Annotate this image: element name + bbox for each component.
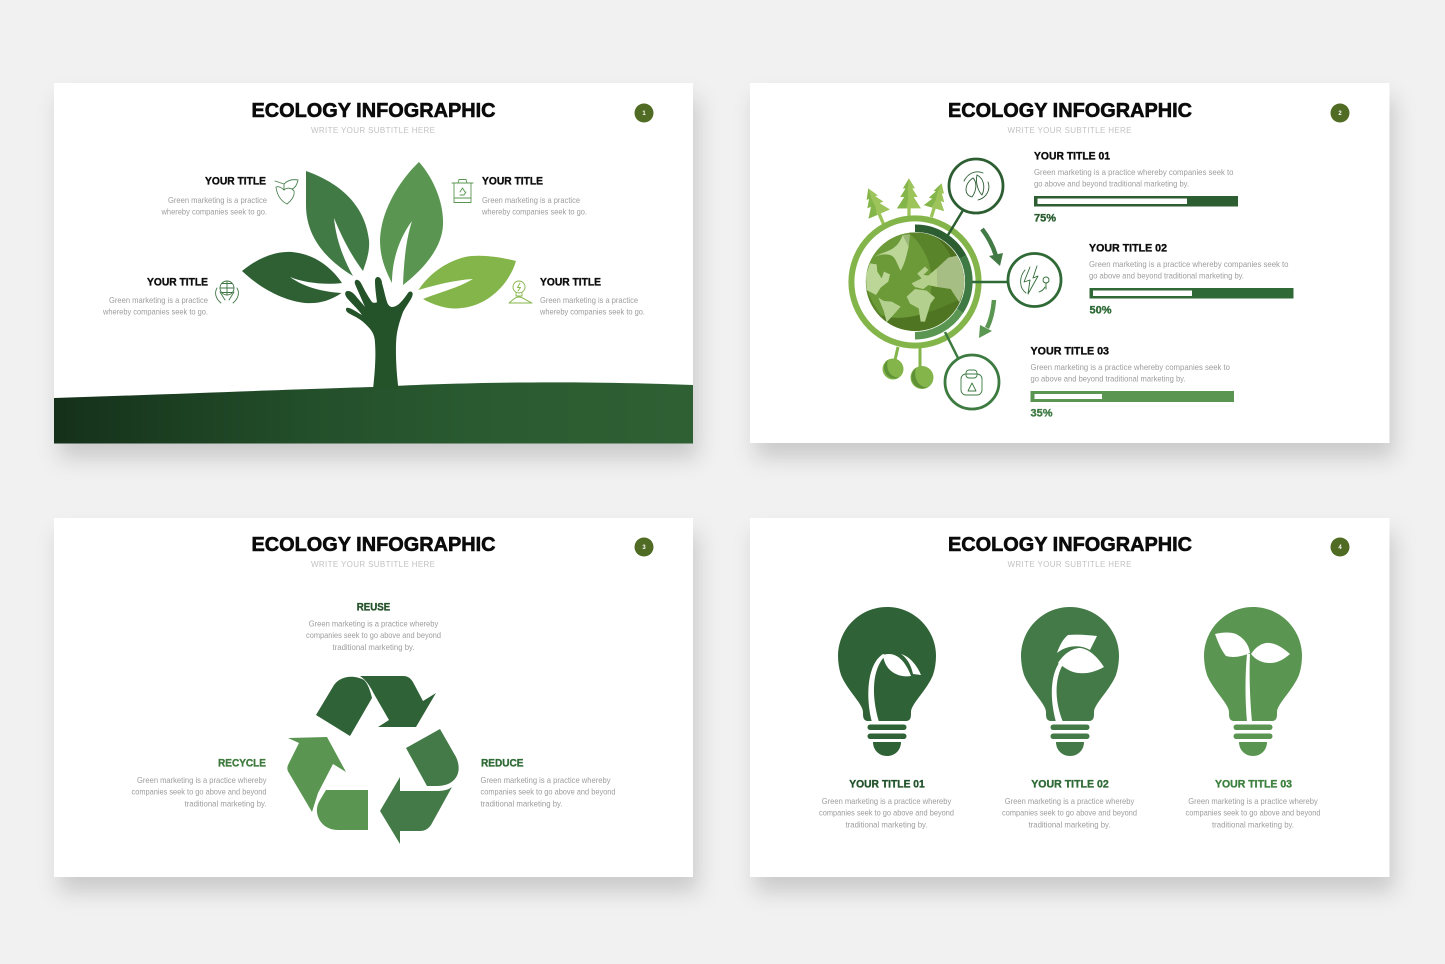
text block top left: YOUR TITLE [205, 175, 266, 187]
text block top right: Green marketing is a practice [482, 195, 580, 205]
text block 02 [1089, 242, 1294, 316]
text block 03: Green marketing is a practice whereby companies seek to [1030, 362, 1230, 372]
title: ECOLOGY INFOGRAPHIC [252, 534, 496, 556]
leaf upper left [306, 171, 369, 276]
text block 02: traditional marketing by. [1028, 820, 1110, 830]
text block bottom right [539, 276, 645, 317]
text block top left: Green marketing is a practice [168, 195, 267, 205]
text block reduce: companies seek to go above and beyond [480, 787, 616, 797]
outer ring [851, 218, 979, 346]
text block 03: 35% [1030, 407, 1053, 419]
leaf top center [380, 162, 443, 285]
text block 01: 75% [1034, 212, 1056, 224]
text block 01: YOUR TITLE 01 [849, 778, 925, 790]
text block top right [481, 175, 587, 217]
arrows [979, 229, 1003, 338]
panel: slide 2 globe [750, 83, 1390, 443]
page badge: 3 [642, 545, 646, 551]
text block top right: whereby companies seek to go. [481, 207, 587, 217]
page badge: 1 [642, 111, 646, 117]
text block reuse [306, 601, 441, 652]
globe [863, 232, 967, 332]
connector lines [945, 207, 1008, 358]
title: ECOLOGY INFOGRAPHIC [948, 534, 1192, 556]
text block reduce [480, 757, 616, 809]
subtitle: WRITE YOUR SUBTITLE HERE [311, 126, 435, 135]
text block 03: YOUR TITLE 03 [1030, 345, 1109, 357]
subtitle: WRITE YOUR SUBTITLE HERE [1008, 560, 1132, 569]
text block bottom left: YOUR TITLE [147, 276, 208, 288]
text block 01: YOUR TITLE 01 [1034, 150, 1110, 162]
text block bottom right: YOUR TITLE [540, 276, 601, 288]
text block 03 [1030, 345, 1234, 419]
text block 03: YOUR TITLE 03 [1215, 778, 1292, 790]
progress bar 50% [1090, 288, 1294, 298]
page badge [1330, 104, 1350, 122]
icon circle 3 [945, 355, 999, 409]
leaf left [242, 252, 342, 303]
text block top right: YOUR TITLE [482, 175, 543, 187]
text block 02: go above and beyond traditional marketing by. [1089, 271, 1244, 281]
text block 01: go above and beyond traditional marketing by. [1034, 179, 1189, 189]
text block reduce: traditional marketing by. [480, 799, 562, 809]
text block bottom left: whereby companies seek to go. [102, 307, 208, 317]
text block 02: Green marketing is a practice whereby companies seek to [1089, 259, 1289, 269]
page badge [634, 538, 654, 556]
recycle symbol [287, 676, 459, 844]
hand trunk [345, 277, 413, 389]
text block 02: YOUR TITLE 02 [1031, 778, 1109, 790]
icon: hands globe [216, 281, 238, 303]
progress bar 75% [1034, 196, 1238, 206]
text block recycle: RECYCLE [218, 757, 266, 769]
icon circle 1 [949, 159, 1003, 213]
text block 02: 50% [1090, 304, 1112, 316]
bulb 1 [838, 607, 936, 756]
text block 03: traditional marketing by. [1212, 820, 1294, 830]
text block reuse: traditional marketing by. [332, 642, 414, 652]
text block 02 [1002, 778, 1137, 830]
text block top left [161, 175, 267, 217]
text block 01: traditional marketing by. [846, 820, 928, 830]
text block reduce: Green marketing is a practice whereby [480, 775, 611, 785]
text block bottom left [102, 276, 208, 317]
panel: slide 4 bulbs [750, 518, 1390, 877]
ground [54, 382, 693, 444]
page badge: 2 [1338, 111, 1342, 117]
bulb 2 [1021, 607, 1119, 756]
text block 03 [1186, 778, 1321, 830]
text block recycle [132, 757, 267, 809]
icon: bulb on ground [509, 281, 532, 303]
text block reuse: Green marketing is a practice whereby [309, 619, 439, 629]
panel: slide 1 tree [54, 83, 693, 444]
text block 03: Green marketing is a practice whereby [1188, 796, 1318, 806]
text block 01 [1034, 150, 1238, 224]
text block recycle: Green marketing is a practice whereby [137, 775, 267, 785]
page badge [634, 104, 654, 122]
text block reduce: REDUCE [481, 757, 524, 769]
icon: leaf heart [275, 180, 298, 204]
page badge: 4 [1338, 545, 1342, 551]
subtitle: WRITE YOUR SUBTITLE HERE [1008, 126, 1132, 135]
text block 01: companies seek to go above and beyond [819, 808, 954, 818]
text block reuse: companies seek to go above and beyond [306, 630, 441, 640]
leaf right [418, 256, 516, 309]
fruit balls [882, 347, 934, 389]
icon circle 2 [1008, 254, 1061, 306]
progress bar 35% [1030, 391, 1234, 402]
trees [858, 178, 952, 228]
globe arc [915, 228, 969, 336]
page badge [1330, 538, 1350, 556]
text block 03: companies seek to go above and beyond [1186, 808, 1321, 818]
text block 02: Green marketing is a practice whereby [1005, 796, 1135, 806]
subtitle: WRITE YOUR SUBTITLE HERE [311, 560, 435, 569]
icon: recycle bin [452, 180, 473, 202]
text block recycle: traditional marketing by. [184, 799, 266, 809]
text block 01: Green marketing is a practice whereby [822, 796, 952, 806]
panel: slide 3 recycle [54, 518, 693, 877]
text block 03: go above and beyond traditional marketing by. [1030, 374, 1186, 384]
text block top left: whereby companies seek to go. [161, 207, 267, 217]
text block 01: Green marketing is a practice whereby companies seek to [1034, 167, 1234, 177]
title: ECOLOGY INFOGRAPHIC [252, 100, 496, 122]
text block bottom right: whereby companies seek to go. [539, 307, 645, 317]
title: ECOLOGY INFOGRAPHIC [948, 100, 1192, 122]
text block bottom right: Green marketing is a practice [540, 295, 638, 305]
text block 02: YOUR TITLE 02 [1089, 242, 1167, 254]
text block recycle: companies seek to go above and beyond [132, 787, 267, 797]
text block bottom left: Green marketing is a practice [109, 295, 208, 305]
text block 02: companies seek to go above and beyond [1002, 808, 1137, 818]
text block reuse: REUSE [357, 601, 390, 613]
bulb 3 [1204, 607, 1302, 756]
text block 01 [819, 778, 954, 830]
